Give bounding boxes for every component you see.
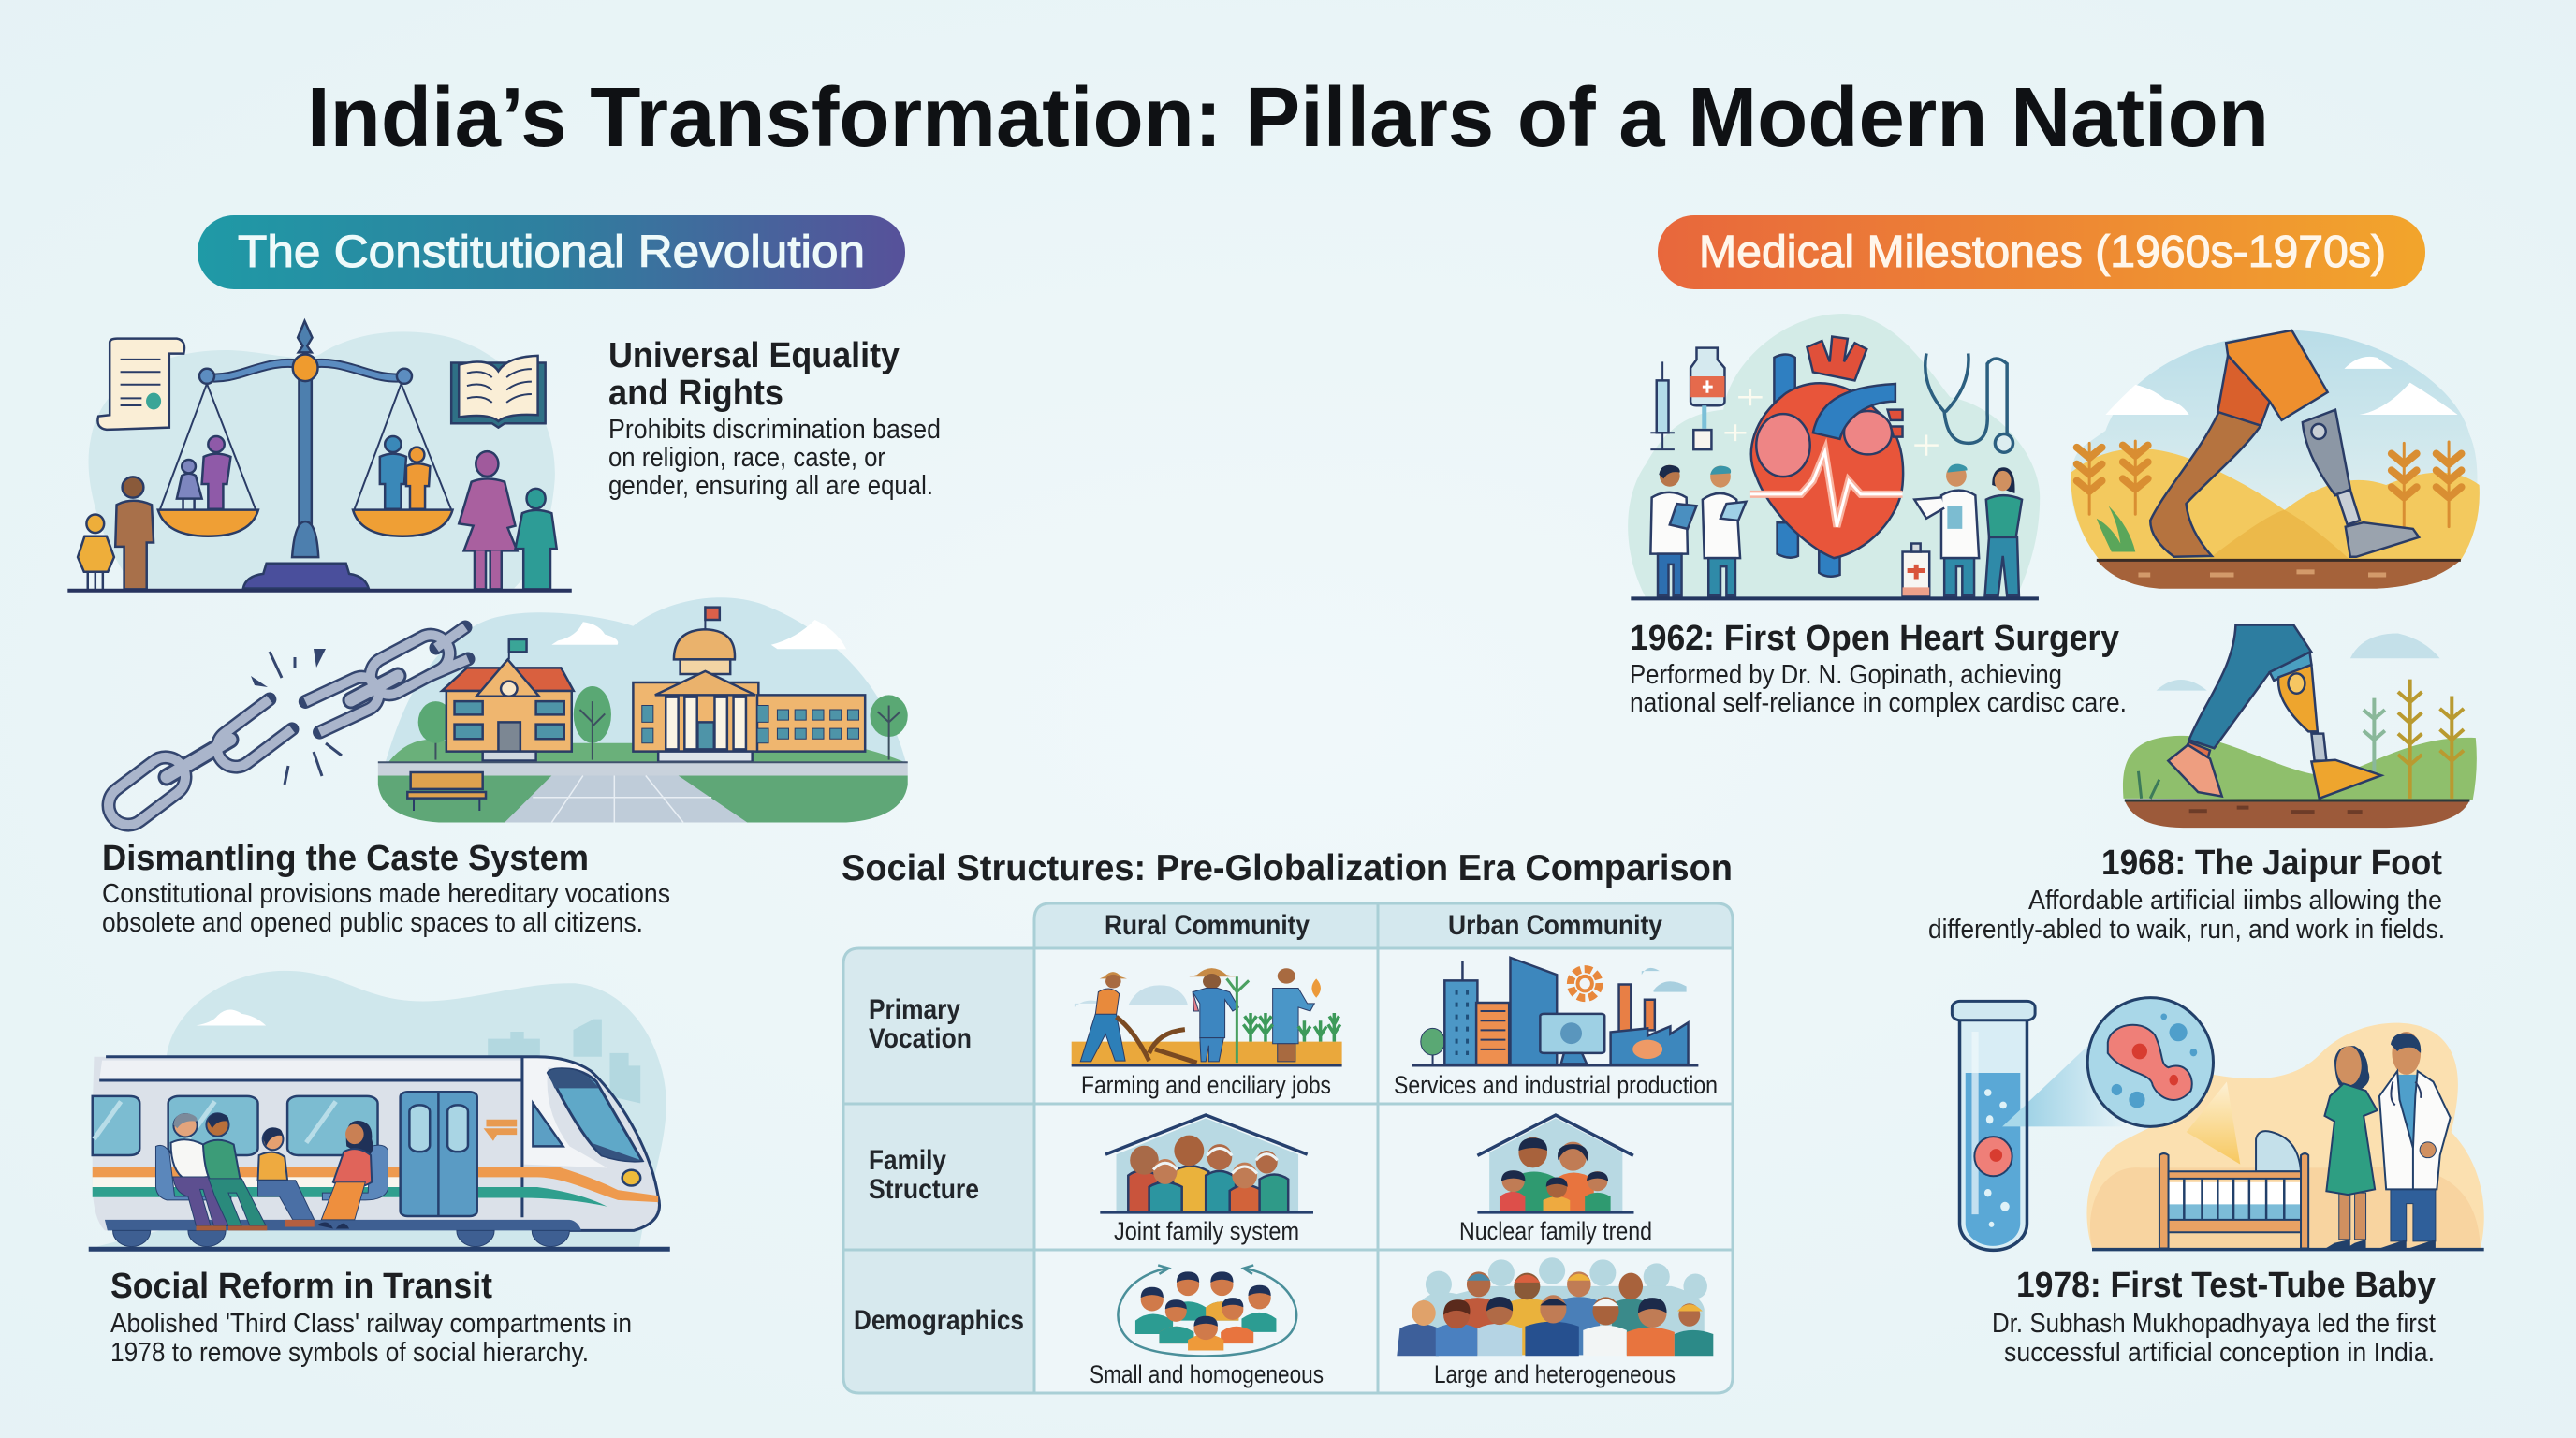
- illustration: prosthetic leg in wheat field: [2071, 330, 2480, 589]
- text: 1968 The Jaipur Foot: Affordable artificial iimbs allowing the: [2028, 886, 2442, 916]
- comparison table: [843, 903, 1733, 1393]
- text: 1968 The Jaipur Foot: [1928, 844, 2445, 945]
- icon: doctors left: [1650, 465, 1746, 595]
- illustration: scales of justice with people: [67, 321, 572, 591]
- callout cones: [2002, 1046, 2240, 1165]
- text: 1962 First Open Heart Surgery: national self-reliance in complex cardisc care.: [1630, 688, 2127, 718]
- icon: scroll: [97, 339, 184, 430]
- wheat stalks: [2077, 441, 2462, 527]
- prosthetic leg: [2303, 410, 2419, 557]
- table illustrations: [1072, 958, 1713, 1356]
- trousers and shoe: [2168, 625, 2311, 797]
- warm background blob: [2086, 1023, 2484, 1248]
- illustration: Jaipur foot: [2123, 625, 2477, 828]
- text: 1968 The Jaipur Foot: 1968: The Jaipur Foot: [2101, 844, 2442, 883]
- column headers: Rural Community: [1105, 910, 1310, 941]
- text: Social Reform in Transit: Abolished 'Third Class' railway compartments in: [110, 1309, 632, 1339]
- ground: [2097, 560, 2461, 589]
- figures on pans: [177, 436, 430, 509]
- cell captions: Nuclear family trend: [1459, 1217, 1652, 1245]
- lawn, road and bench: [378, 762, 908, 823]
- text: Dismantling the Caste System: Dismantling the Caste System: [102, 839, 589, 878]
- pans: [158, 510, 453, 536]
- school building: [442, 639, 574, 760]
- cell captions: Large and heterogeneous: [1434, 1360, 1676, 1388]
- icon: farmers: [1072, 968, 1342, 1065]
- icon: broken chain: [101, 627, 468, 832]
- text: Universal Equality and Rights: [608, 336, 941, 501]
- text: 1962 First Open Heart Surgery: Performed by Dr. N. Gopinath, achieving: [1630, 660, 2062, 690]
- row labels: Primary: [869, 994, 960, 1025]
- section pill: Medical Milestones: [1658, 215, 2425, 289]
- icon: city and industry: [1412, 958, 1698, 1065]
- text: Dismantling the Caste System: Constitutional provisions made hereditary vocations: [102, 879, 670, 909]
- doors: [401, 1092, 477, 1216]
- cell captions: Services and industrial production: [1394, 1071, 1718, 1099]
- shorts: [2217, 330, 2328, 426]
- illustration: test tube baby: [1952, 998, 2484, 1250]
- icon: large heterogeneous group: [1397, 1257, 1713, 1356]
- domed building: [633, 606, 865, 762]
- icon: small homogeneous group: [1118, 1265, 1296, 1356]
- train body: [93, 1057, 660, 1230]
- standing figures: [78, 451, 557, 589]
- icon: medical kit: [1903, 544, 1929, 595]
- cab windows and headlight: [533, 1069, 642, 1186]
- icon: open book: [451, 356, 546, 428]
- icon: stethoscope: [1925, 353, 2013, 452]
- text: Dismantling the Caste System: [102, 839, 670, 938]
- column headers: [1105, 910, 1662, 941]
- passengers: [155, 1113, 388, 1230]
- text: 1968 The Jaipur Foot: differently-abled to waik, run, and work in fields.: [1928, 915, 2445, 945]
- stripes: [93, 1167, 658, 1207]
- text: 1978 First Test-Tube Baby: [1992, 1266, 2436, 1368]
- illustration: train with passengers: [89, 971, 670, 1249]
- icon: syringe: [1650, 361, 1675, 449]
- cell captions: Joint family system: [1114, 1217, 1299, 1245]
- icon: nuclear family: [1477, 1115, 1633, 1212]
- doctor: [2379, 1032, 2451, 1248]
- text: 1962 First Open Heart Surgery: [1630, 619, 2127, 718]
- column headers: Urban Community: [1448, 910, 1662, 941]
- row labels: Vocation: [869, 1023, 972, 1054]
- text: Social Reform in Transit: [110, 1267, 632, 1368]
- underframe and wheels: [89, 1220, 670, 1249]
- magnifier circle: [2087, 998, 2213, 1126]
- row labels: Structure: [869, 1174, 979, 1205]
- cell captions: Farming and enciliary jobs: [1081, 1071, 1331, 1099]
- row labels: Family: [869, 1145, 946, 1176]
- title: India’s Transformation: Pillars of a Modern Nation: [307, 71, 2269, 165]
- row labels: Demographics: [854, 1305, 1024, 1336]
- biological leg: [2150, 412, 2261, 557]
- orange prosthesis: [2278, 665, 2381, 799]
- illustration: open heart surgery scene: [1628, 314, 2040, 598]
- woman: [2324, 1046, 2378, 1248]
- crib: [2159, 1131, 2308, 1248]
- text: Universal Equality and Rights: on religion, race, caste, or: [608, 443, 886, 473]
- section pill: The Constitutional Revolution: [198, 215, 905, 289]
- text: Social Reform in Transit: 1978 to remove symbols of social hierarchy.: [110, 1338, 589, 1368]
- cell captions: [1081, 1071, 1718, 1388]
- test tube: [1952, 1001, 2035, 1250]
- text: 1978 First Test-Tube Baby: successful artificial conception in India.: [2004, 1338, 2435, 1368]
- text: Universal Equality and Rights: gender, ensuring all are equal.: [608, 471, 933, 501]
- text: 1978 First Test-Tube Baby: 1978: First Test-Tube Baby: [2016, 1266, 2436, 1305]
- text: Universal Equality and Rights: and Rights: [608, 374, 783, 413]
- text: Universal Equality and Rights: Prohibits discrimination based: [608, 415, 941, 445]
- section pill: Medical Milestones: Medical Milestones (1960s-1970s): [1699, 227, 2386, 277]
- heart: [1750, 337, 1903, 577]
- sparkles: [1724, 389, 1939, 456]
- logo: [484, 1120, 517, 1141]
- trees: [418, 686, 908, 760]
- text: Universal Equality and Rights: Universal Equality: [608, 336, 900, 375]
- plants: [2364, 680, 2464, 799]
- text: Dismantling the Caste System: obsolete and opened public spaces to all citizens.: [102, 908, 643, 938]
- icon: medicine bottle: [1690, 348, 1724, 449]
- windows: [93, 1096, 378, 1155]
- heading: table title: Social Structures: Pre-Globalization Era Comparison: [842, 848, 1733, 888]
- scale stand and beam: [160, 321, 451, 589]
- cell captions: Small and homogeneous: [1090, 1360, 1324, 1388]
- row labels: [854, 994, 1024, 1336]
- icon: medical staff right: [1914, 464, 2022, 595]
- section pill: The Constitutional Revolution: The Constitutional Revolution: [238, 227, 865, 277]
- text: 1978 First Test-Tube Baby: Dr. Subhash Mukhopadhyaya led the first: [1992, 1309, 2436, 1339]
- icon: joint family: [1100, 1115, 1313, 1212]
- text: Social Reform in Transit: Social Reform in Transit: [110, 1267, 492, 1306]
- text: 1962 First Open Heart Surgery: 1962: First Open Heart Surgery: [1630, 619, 2119, 658]
- illustration: campus and public buildings: [378, 597, 908, 823]
